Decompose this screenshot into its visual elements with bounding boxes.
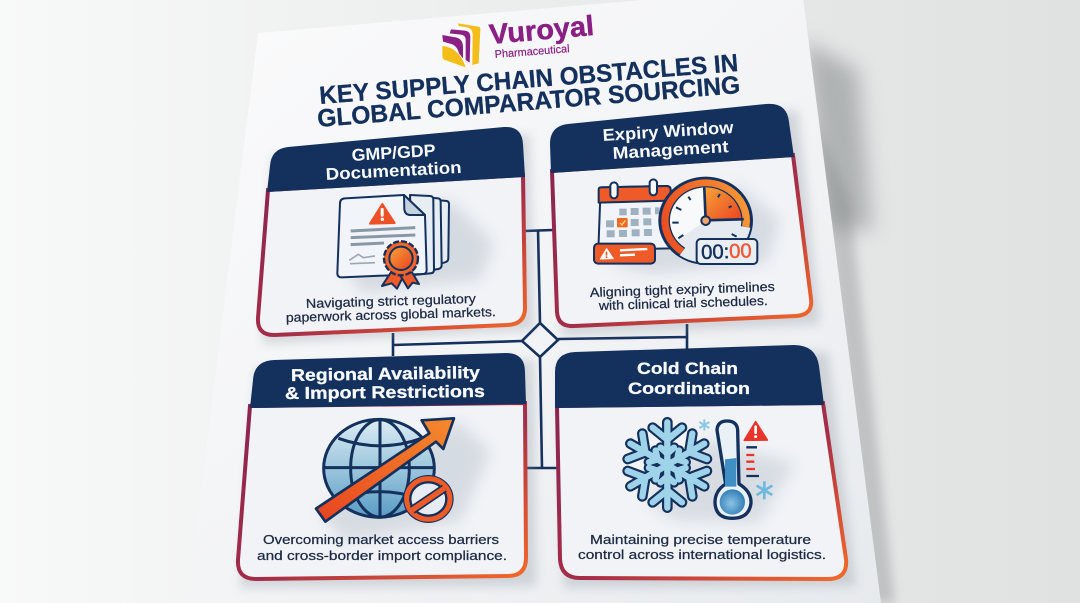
title: KEY SUPPLY CHAIN OBSTACLES IN: [318, 49, 739, 110]
panel description: Maintaining precise temperature: [590, 532, 811, 547]
panel description: Navigating strict regulatory: [306, 291, 477, 311]
panel heading: [250, 353, 526, 408]
icon: calendar, clock and timer: [594, 168, 780, 273]
panel heading: Documentation: [325, 158, 462, 184]
clock: [649, 168, 762, 273]
panel heading: Management: [612, 137, 729, 163]
panel description: Overcoming market access barriers: [263, 532, 500, 547]
title: GLOBAL COMPARATOR SOURCING: [316, 71, 741, 133]
icon: calendar, clock and timer: 00:00: [701, 240, 752, 264]
panel: Cold Chain Coordination: [555, 345, 856, 588]
panel heading: Cold Chain: [637, 359, 738, 378]
logo name: Vuroyal: [488, 10, 595, 50]
icon: snowflake and thermometer: [623, 419, 795, 523]
logo mark: [442, 23, 480, 67]
panel description: and cross-border import compliance.: [257, 548, 507, 563]
panel heading: & Import Restrictions: [285, 382, 485, 403]
panel: Expiry Window Management: [550, 104, 820, 336]
panel description: [578, 532, 826, 562]
connector lines: [393, 230, 687, 468]
panel heading: Expiry Window: [602, 118, 735, 145]
logo subtitle: Pharmaceutical: [494, 43, 570, 61]
panel description: [590, 279, 776, 313]
paper shadow: [803, 40, 895, 603]
panel heading: [555, 345, 824, 408]
panel: Regional Availability & Import Restrictions: [238, 353, 536, 588]
panel heading: [267, 127, 525, 192]
panel heading: Coordination: [628, 379, 750, 398]
panel description: [286, 291, 496, 325]
icon: documents with warning and seal: [337, 195, 493, 293]
panel heading: Regional Availability: [291, 363, 481, 385]
panel heading: GMP/GDP: [351, 141, 436, 165]
icon: snowflake: [623, 422, 712, 508]
panel description: control across international logistics.: [578, 547, 826, 562]
panel description: paperwork across global markets.: [286, 304, 496, 325]
paper sheet: [187, 0, 881, 603]
panel description: [257, 532, 507, 563]
panel description: Aligning tight expiry timelines: [590, 279, 776, 300]
icon: globe with arrow and prohibition sign: [316, 418, 490, 542]
icon: thermometer: [715, 421, 751, 518]
panel heading: [550, 104, 794, 173]
panel: GMP/GDP Documentation: [258, 127, 534, 344]
logo: [442, 10, 595, 67]
panel description: with clinical trial schedules.: [598, 293, 768, 313]
